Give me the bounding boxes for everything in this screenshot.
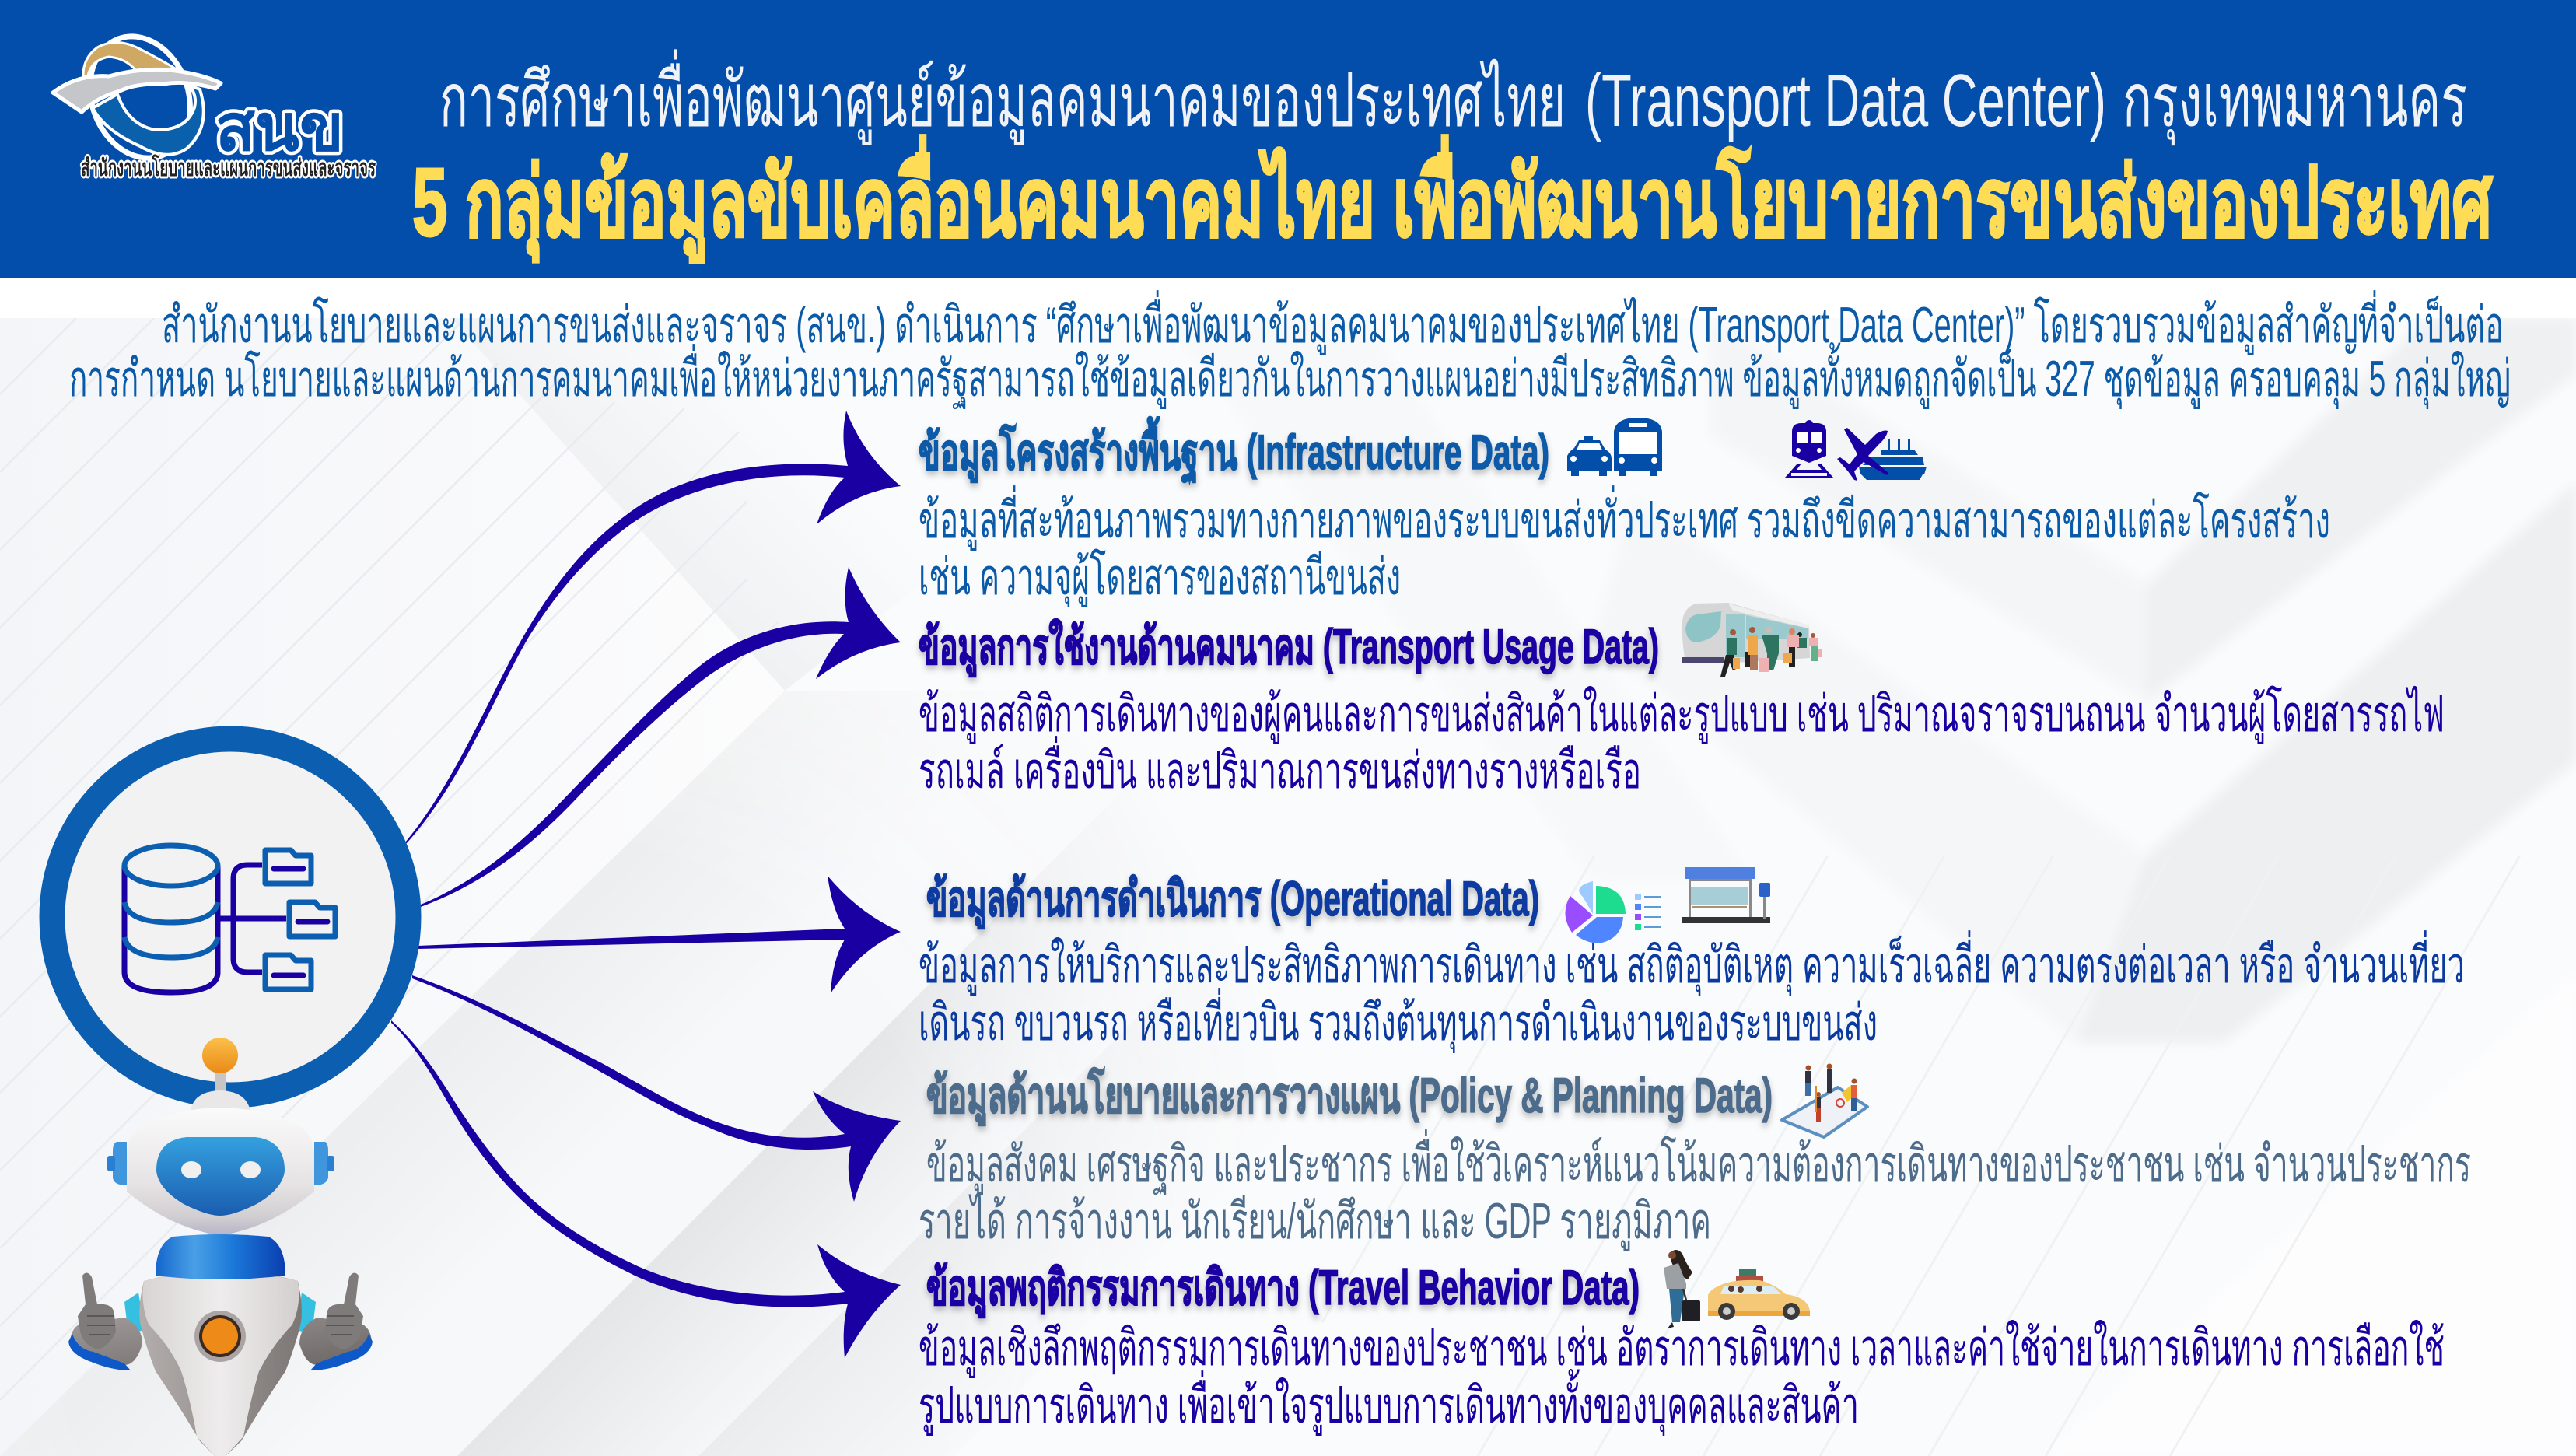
body — [139, 1271, 302, 1456]
body: behavior — [919, 1319, 2445, 1437]
arrow to behavior — [391, 1020, 901, 1358]
eyes — [181, 1161, 261, 1178]
body: infrastructure — [919, 485, 2330, 608]
icon: plane — [1837, 428, 1888, 481]
robot mascot — [68, 1038, 373, 1456]
icon: bus stop — [1682, 867, 1770, 923]
head — [127, 1108, 314, 1235]
heading: behavior: ข้อมูลพฤติกรรมการเดินทาง (Travel Behavior Data) — [926, 1261, 1640, 1318]
heading: usage: ข้อมูลการใช้งานด้านคมนาคม (Transport Usage Data) — [919, 618, 1659, 677]
logo silver band — [53, 69, 221, 112]
icon: database with folders — [124, 845, 335, 992]
collar — [156, 1234, 285, 1279]
arrow to policy — [412, 975, 901, 1202]
body: policy — [919, 1129, 2471, 1251]
section: infrastructure — [919, 416, 2330, 608]
heading: infrastructure: ข้อมูลโครงสร้างพื้นฐาน (Infrastructure Data) — [919, 416, 1549, 484]
arrow to infrastructure — [405, 411, 901, 844]
thumbs-up hands — [78, 1272, 363, 1349]
arms — [68, 1293, 373, 1370]
body: usage: รถเมล์ เครื่องบิน และปริมาณการขนส่งทางรางหรือเรือ — [919, 736, 1641, 799]
ears — [107, 1142, 334, 1185]
section: operational — [919, 872, 2465, 1054]
logo subtitle: สำนักงานนโยบายและแผนการขนส่งและจราจร — [81, 153, 376, 181]
icon: bus with passengers — [1682, 603, 1822, 677]
icon: family car — [1708, 1269, 1810, 1320]
title — [412, 49, 2494, 263]
face visor — [156, 1137, 285, 1216]
logo — [53, 23, 376, 181]
logo blue crescent — [93, 85, 204, 155]
heading: operational: ข้อมูลด้านการดำเนินการ (Operational Data) — [926, 872, 1539, 929]
body: policy: รายได้ การจ้างงาน นักเรียน/นักศึกษา และ GDP รายภูมิภาค — [919, 1192, 1711, 1251]
body: behavior: รูปแบบการเดินทาง เพื่อเข้าใจรูปแบบการเดินทางทั้งของบุคคลและสินค้า — [919, 1369, 1859, 1437]
title line 1: การศึกษาเพื่อพัฒนาศูนย์ข้อมูลคมนาคมของประเทศไทย — [439, 49, 1566, 145]
section: usage — [919, 618, 2445, 799]
header band — [0, 0, 2576, 278]
intro paragraph — [69, 290, 2511, 410]
antenna — [191, 1038, 250, 1111]
section: behavior — [919, 1261, 2445, 1437]
heading: policy: ข้อมูลด้านนโยบายและการวางแผน (Policy & Planning Data) — [926, 1066, 1773, 1126]
icon: pie chart — [1565, 881, 1661, 943]
section: policy — [919, 1066, 2471, 1251]
icon: taxi and bus — [1567, 418, 1662, 476]
data circle — [52, 739, 408, 1095]
logo wordmark: สนข — [215, 91, 344, 164]
title line 1: (Transport Data Center) — [1585, 59, 2106, 142]
icon: ship — [1859, 439, 1927, 480]
chest button — [194, 1311, 246, 1362]
arrow to operational — [418, 876, 901, 993]
icon: woman with suitcase — [1664, 1250, 1700, 1328]
background — [0, 318, 2576, 1456]
body: operational: เดินรถ ขบวนรถ หรือเที่ยวบิน รวมถึงต้นทุนการดำเนินงานของระบบขนส่ง — [919, 988, 1878, 1054]
arrow to usage — [421, 567, 901, 907]
icon: planning tablet with people — [1782, 1064, 1867, 1137]
logo ring — [73, 23, 207, 172]
arrows — [391, 411, 901, 1358]
circle ring — [52, 739, 408, 1095]
body: infrastructure: เช่น ความจุผู้โดยสารของสถานีขนส่ง — [919, 548, 1401, 608]
logo gold arc — [83, 42, 184, 77]
body: operational — [919, 930, 2465, 1054]
body: usage — [919, 685, 2445, 799]
icon: train — [1785, 420, 1833, 478]
